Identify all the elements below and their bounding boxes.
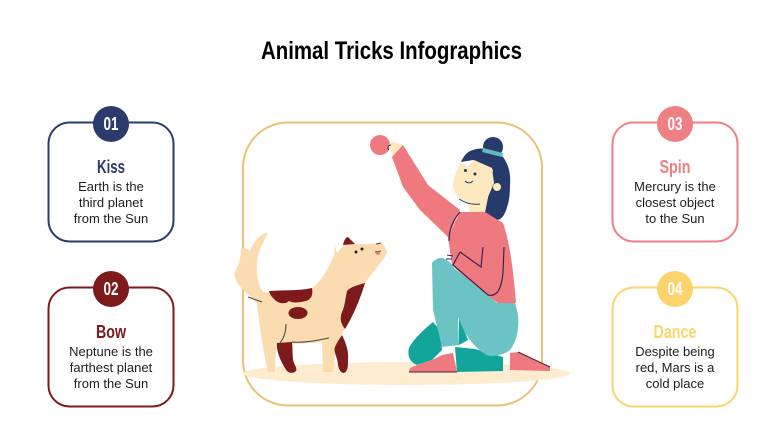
panel: 03 Spin: 03 bbox=[668, 114, 682, 134]
panel: 04 Dance: 04 bbox=[668, 279, 682, 299]
title: Animal Tricks Infographics bbox=[261, 37, 522, 65]
panel: 01 Kiss: from the Sun bbox=[74, 211, 148, 226]
illustration: girl bbox=[370, 135, 550, 372]
hand bbox=[388, 142, 403, 157]
panel: 03 Spin: Mercury is the bbox=[634, 179, 716, 194]
teal leg bbox=[432, 258, 518, 356]
face bbox=[453, 160, 494, 212]
bun and band bbox=[483, 137, 503, 157]
panel: 04 Dance: red, Mars is a bbox=[636, 360, 715, 375]
panel: 01 Kiss: third planet bbox=[79, 195, 144, 210]
panel: 01 Kiss: Earth is the bbox=[78, 179, 144, 194]
panel: 01 Kiss bbox=[48, 106, 174, 242]
shoes bbox=[409, 353, 457, 372]
panel: 04 Dance: Despite being bbox=[635, 344, 715, 359]
ground ellipse bbox=[243, 362, 570, 385]
panel: 03 Spin: to the Sun bbox=[645, 211, 705, 226]
torso bbox=[448, 212, 516, 303]
panel: 04 Dance: cold place bbox=[646, 376, 704, 391]
panel: 02 Bow: Bow bbox=[96, 322, 127, 342]
arm raised bbox=[392, 145, 460, 237]
panel: 02 Bow: 02 bbox=[104, 279, 118, 299]
panel: 01 Kiss: 01 bbox=[104, 114, 118, 134]
panel: 02 Bow: from the Sun bbox=[74, 376, 148, 391]
panel: 03 Spin: closest object bbox=[636, 195, 715, 210]
dark teal lower leg bbox=[408, 318, 468, 365]
panel: 04 Dance: Dance bbox=[654, 322, 696, 342]
panel: 02 Bow: Neptune is the bbox=[69, 344, 153, 359]
panel: 02 Bow bbox=[48, 271, 174, 406]
illustration: dog bbox=[234, 233, 387, 373]
forearm bbox=[453, 247, 504, 295]
central illustration frame bbox=[243, 122, 542, 406]
hand on knee and arm lines bbox=[449, 212, 504, 295]
hair back bbox=[461, 148, 510, 220]
panel: 04 Dance bbox=[612, 271, 738, 406]
panel: 03 Spin bbox=[612, 106, 738, 242]
ball bbox=[370, 135, 390, 155]
panel: 01 Kiss: Kiss bbox=[97, 157, 125, 177]
panel: 02 Bow: farthest planet bbox=[70, 360, 153, 375]
panel: 03 Spin: Spin bbox=[660, 157, 690, 177]
